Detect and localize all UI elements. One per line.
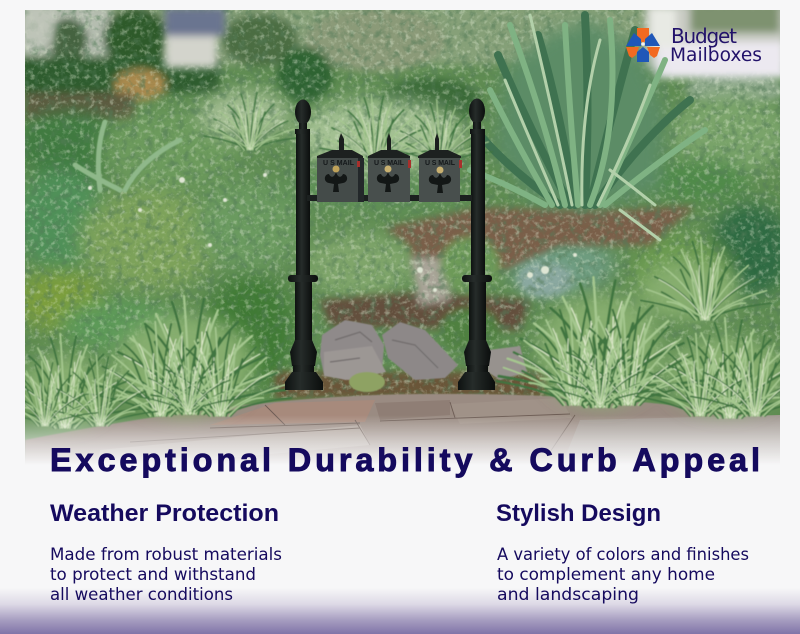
bottom gradient band <box>0 588 800 634</box>
rocks <box>320 320 527 392</box>
left post <box>285 100 323 390</box>
logo wordmark: Budget <box>671 24 737 48</box>
body: stylish design: and landscaping <box>497 585 639 604</box>
body: weather protection: to protect and withstand <box>50 565 256 584</box>
column: weather protection <box>50 500 282 604</box>
mailbox post assembly <box>285 98 495 390</box>
title: Exceptional Durability & Curb Appeal <box>50 442 760 478</box>
body: stylish design <box>497 545 749 604</box>
crossbar <box>307 195 472 201</box>
mailbox right <box>418 133 462 202</box>
mailbox middle: U S MAIL <box>374 160 405 167</box>
body: weather protection: all weather conditions <box>50 585 233 604</box>
body: stylish design: to complement any home <box>497 565 715 584</box>
mailbox right: U S MAIL <box>425 160 456 167</box>
body: weather protection: Made from robust materials <box>50 545 282 564</box>
column: stylish design <box>496 500 749 604</box>
body: weather protection <box>50 545 282 604</box>
fade of photo into page <box>25 415 780 465</box>
mailbox left <box>317 133 364 202</box>
heading: weather protection: Weather Protection <box>50 500 279 527</box>
right post <box>458 98 495 390</box>
logo: Budget Mailboxes: Mailboxes <box>670 44 762 66</box>
icon: six-petal logo mark <box>626 28 660 62</box>
mailbox middle <box>368 133 411 202</box>
mid-ground planting masses <box>15 91 792 385</box>
garden photo <box>0 5 800 470</box>
body: stylish design: A variety of colors and finishes <box>497 545 749 564</box>
agave plant <box>470 15 705 240</box>
house and wall highlights <box>25 5 785 78</box>
leaf texture <box>25 10 780 398</box>
paving path <box>25 393 780 459</box>
grass clumps <box>0 91 800 428</box>
mailbox left: U S MAIL <box>323 160 355 167</box>
background: trees and hedge <box>20 5 785 122</box>
mulch bed <box>275 206 695 398</box>
heading: stylish design: Stylish Design <box>496 500 661 527</box>
logo: Budget Mailboxes <box>626 24 762 66</box>
